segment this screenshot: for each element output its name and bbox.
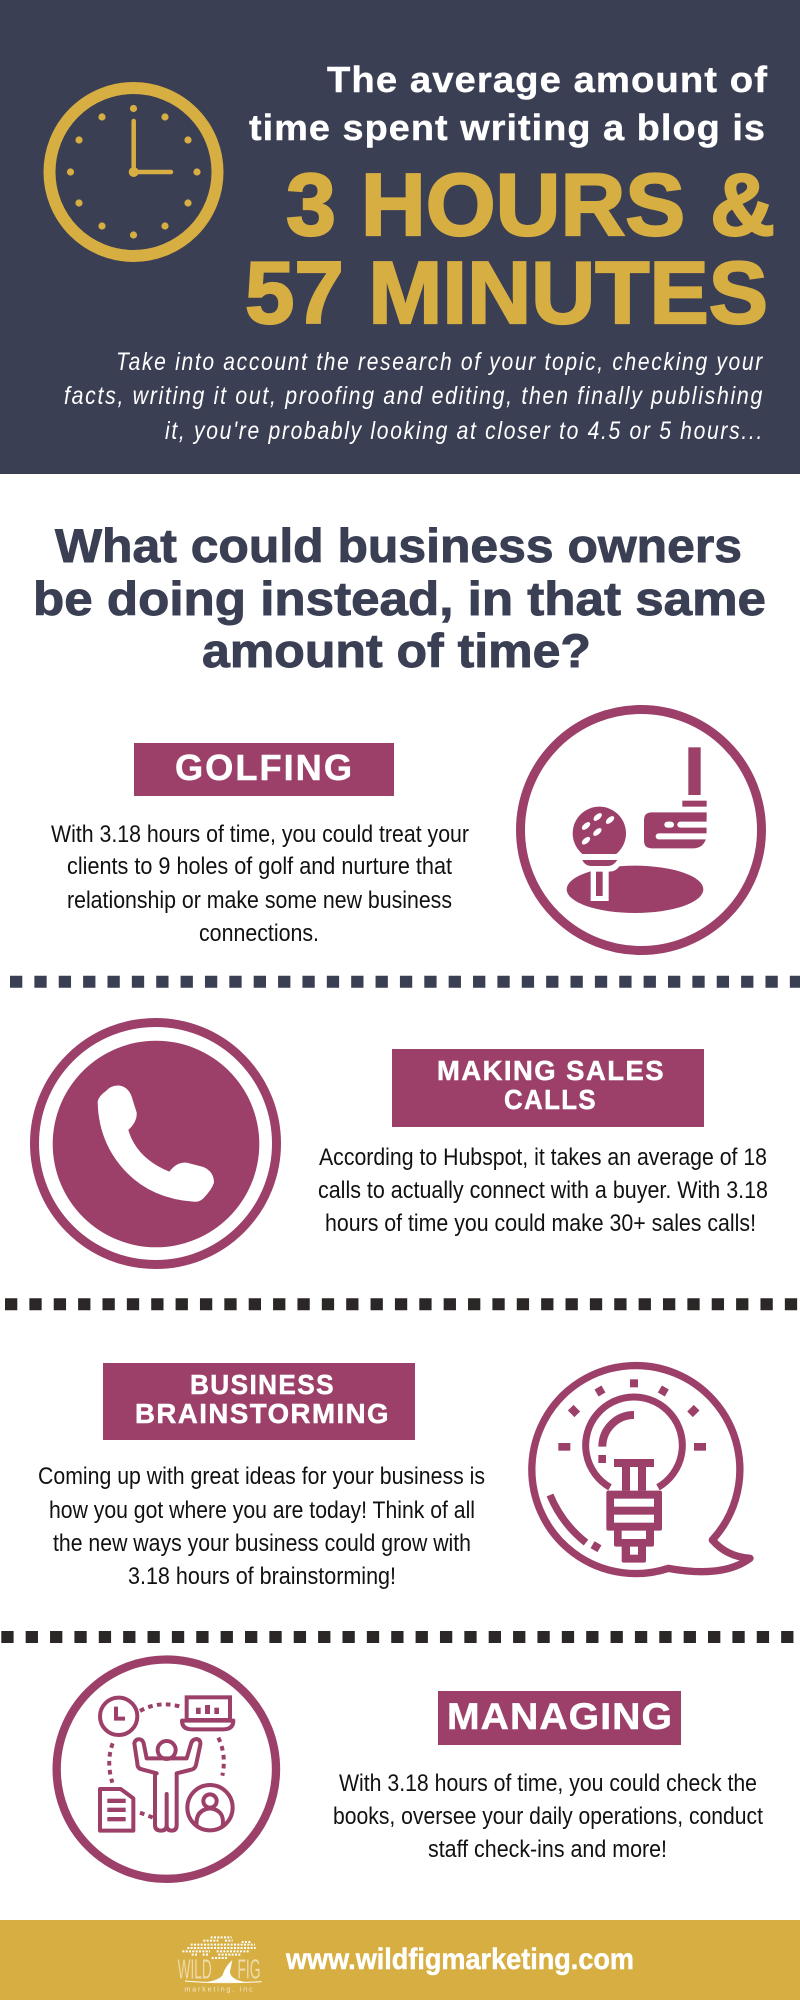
sales calls tag: CALLS	[504, 1084, 597, 1115]
managing description: staff check-ins and more!	[428, 1836, 667, 1863]
brainstorming description	[38, 1463, 485, 1590]
panel: header	[0, 0, 800, 474]
header intro text	[249, 59, 768, 148]
icon: light bulb in speech bubble	[532, 1366, 750, 1574]
golfing description: clients to 9 holes of golf and nurture that	[67, 853, 452, 880]
icon: phone	[34, 1022, 276, 1264]
golfing tag: GOLFING	[175, 747, 354, 788]
icon: clock	[50, 88, 218, 256]
heading: what could business owners do: be doing instead, in that same	[33, 572, 766, 625]
brainstorming tag: BUSINESS	[190, 1369, 335, 1400]
managing tag	[438, 1691, 681, 1745]
sales calls description	[318, 1144, 768, 1237]
managing description: With 3.18 hours of time, you could check the	[339, 1770, 757, 1797]
managing description	[333, 1770, 763, 1863]
golfing description: relationship or make some new business	[67, 887, 452, 914]
logo: wild fig marketing: WILD	[178, 1953, 212, 1984]
icon: golf club and ball	[520, 710, 762, 950]
managing tag: MANAGING	[447, 1696, 673, 1737]
logo: wild fig marketing: FIG	[237, 1953, 261, 1984]
golfing description	[51, 821, 469, 947]
heading: what could business owners do	[33, 519, 766, 677]
icon: manager with tasks	[57, 1659, 276, 1879]
header intro text: time spent writing a blog is	[249, 107, 766, 148]
sales calls tag	[392, 1049, 704, 1127]
panel: making sales calls	[34, 1022, 768, 1264]
brainstorming tag: BRAINSTORMING	[135, 1398, 390, 1429]
header note	[64, 348, 764, 445]
golfing description: connections.	[199, 920, 319, 947]
heading: what could business owners do: What could business owners	[55, 519, 742, 572]
brainstorming description: the new ways your business could grow with	[53, 1530, 471, 1557]
brainstorming description: Coming up with great ideas for your business is	[38, 1463, 485, 1490]
brainstorming description: 3.18 hours of brainstorming!	[128, 1563, 396, 1590]
panel: golfing	[51, 710, 762, 950]
golfing description: With 3.18 hours of time, you could treat your	[51, 821, 469, 848]
panel: business brainstorming	[38, 1363, 750, 1590]
website url: www.wildfigmarketing.com	[285, 1943, 634, 1976]
brainstorming tag	[103, 1363, 415, 1440]
headline statistic: 3 HOURS &	[286, 155, 775, 254]
logo: wild fig marketing: marketing, inc	[184, 1985, 253, 1994]
heading: what could business owners do: amount of time?	[202, 624, 591, 677]
header intro text: The average amount of	[327, 59, 768, 100]
brainstorming description: how you got where you are today! Think of all	[49, 1497, 475, 1524]
headline statistic: 57 MINUTES	[245, 243, 768, 342]
headline statistic	[245, 155, 775, 342]
sales calls description: hours of time you could make 30+ sales calls!	[325, 1210, 756, 1237]
panel: managing	[57, 1659, 763, 1879]
logo: wild fig marketing	[178, 1937, 262, 1994]
sales calls tag: MAKING SALES	[437, 1055, 665, 1086]
golfing tag	[134, 743, 394, 796]
panel: footer	[0, 1920, 800, 2000]
